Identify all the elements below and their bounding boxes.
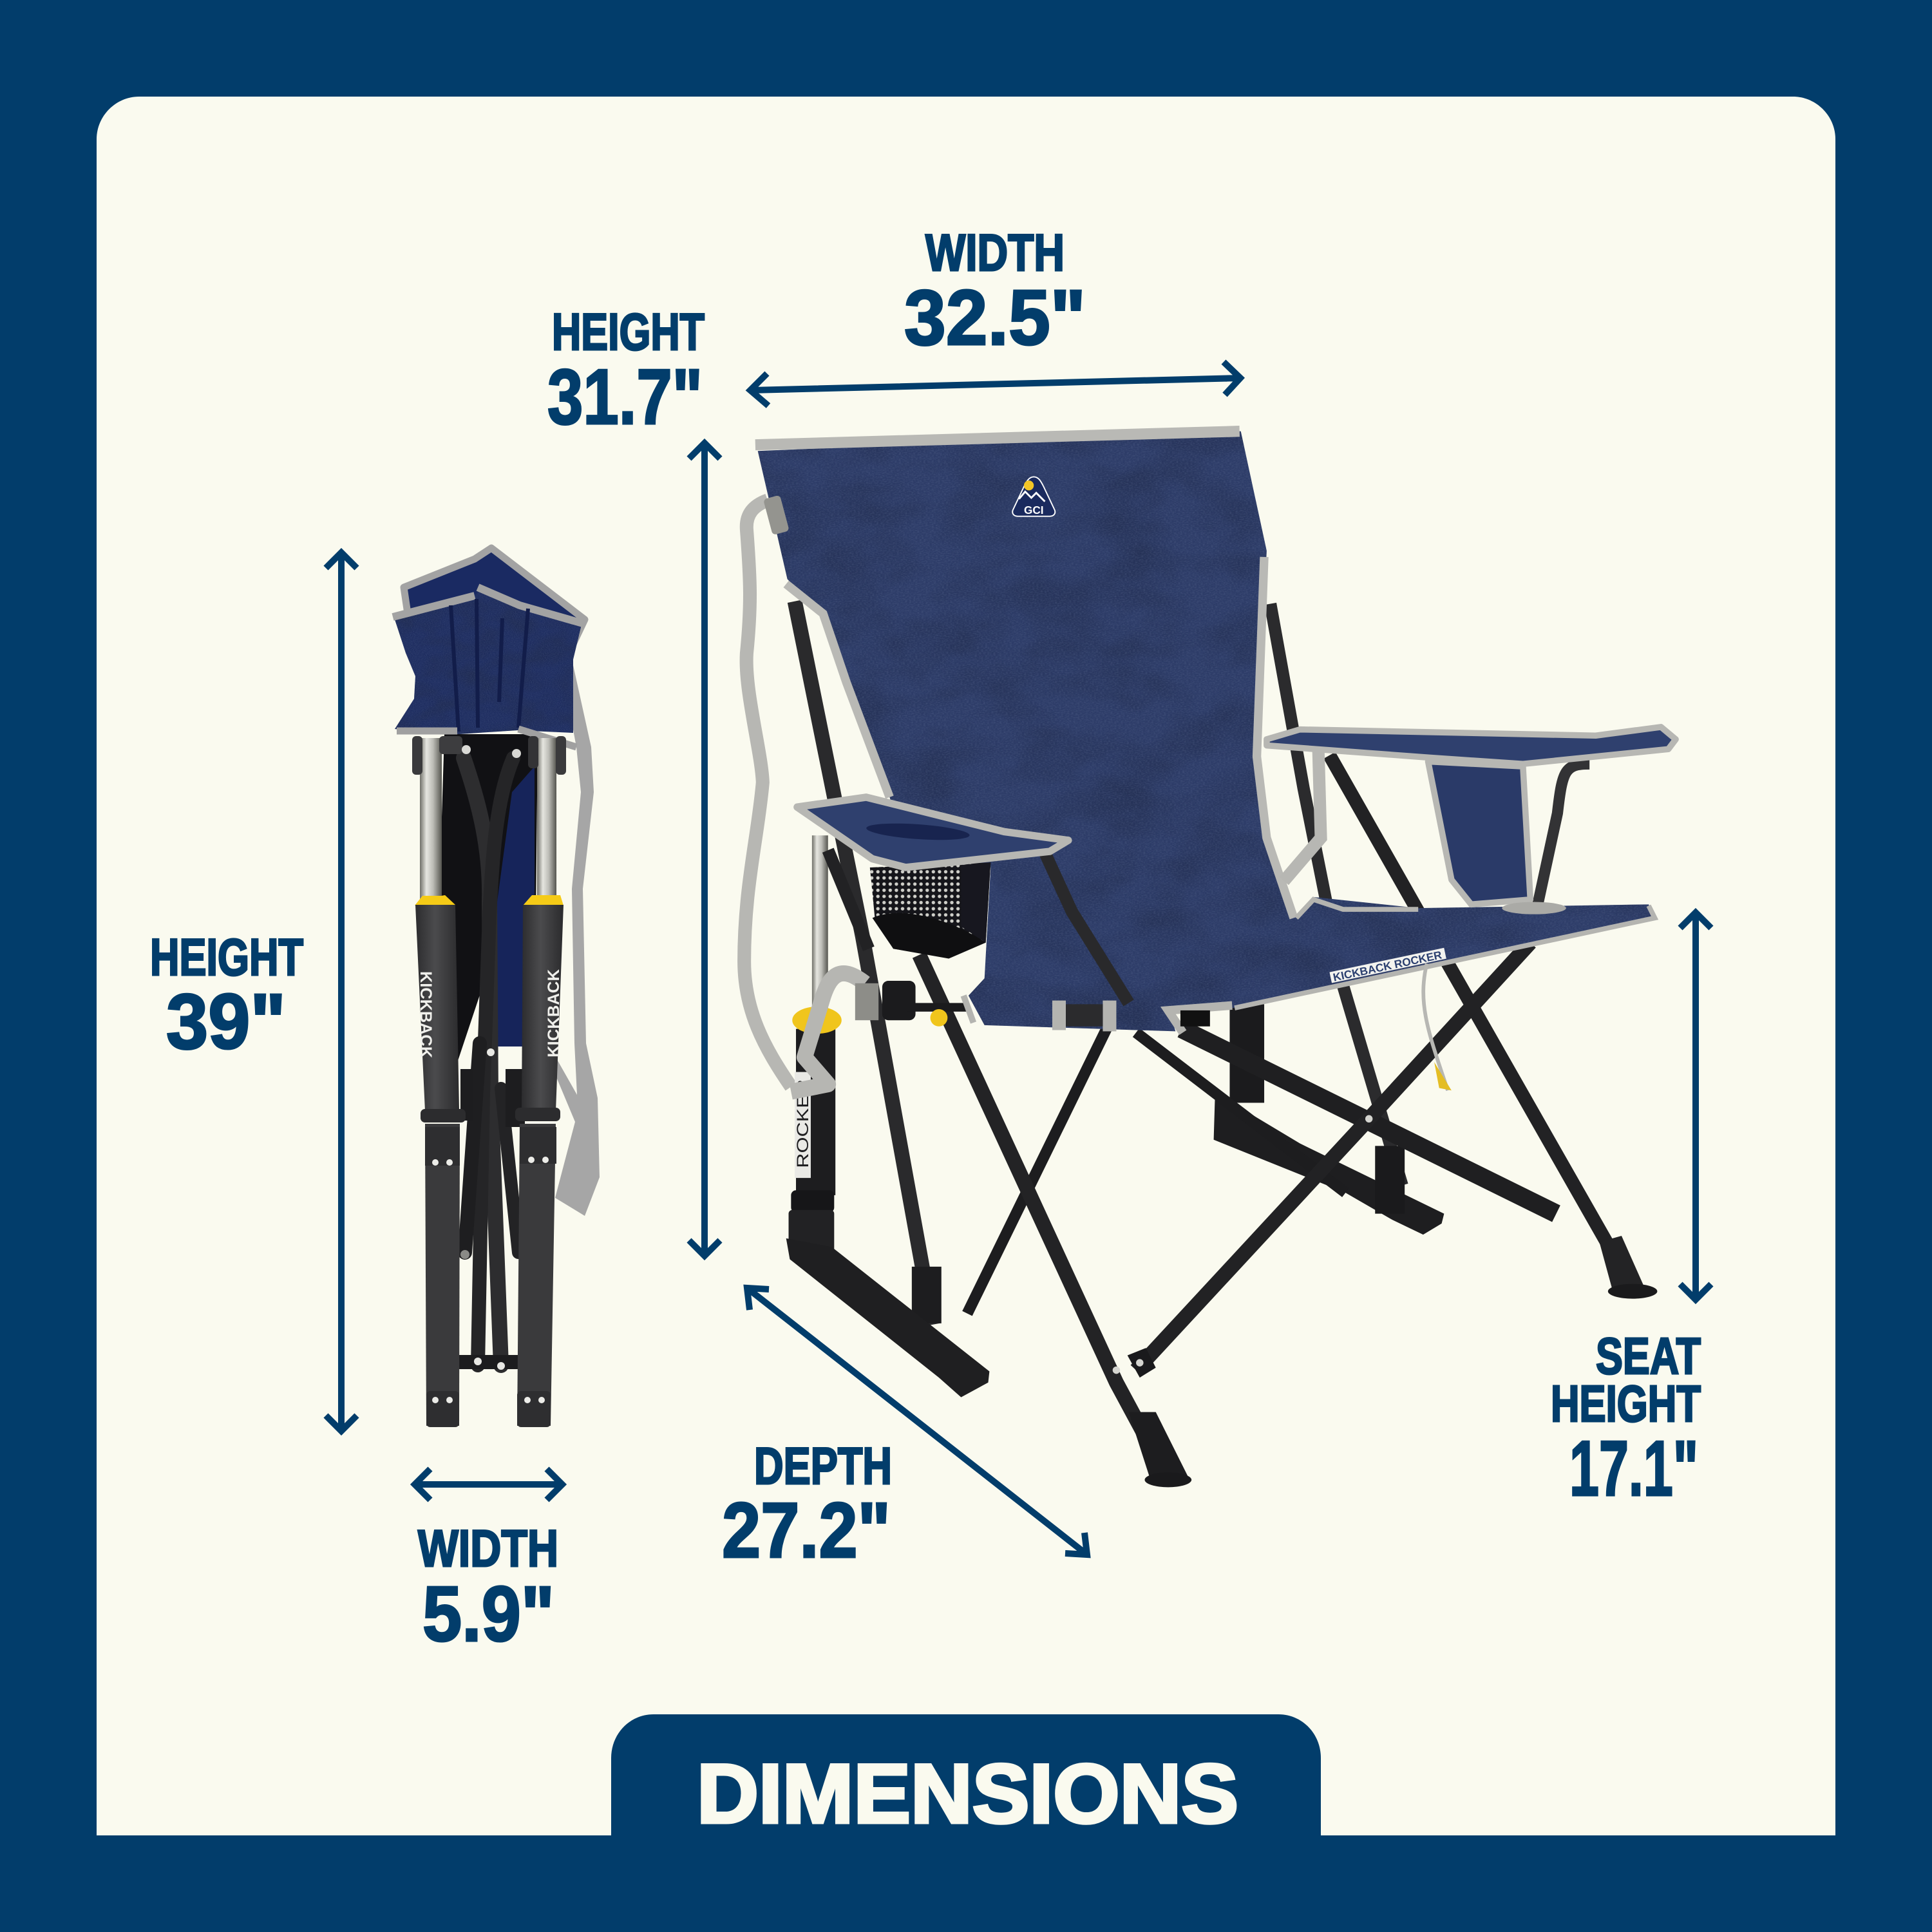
arrow: folded width xyxy=(415,1469,562,1500)
carrying strap behind back xyxy=(744,500,791,1087)
folded chair photo illustration xyxy=(393,548,600,1427)
strap loop xyxy=(791,973,865,1092)
rocker post label: ROCKER xyxy=(794,1079,812,1168)
label: top width xyxy=(904,224,1086,361)
label: seat height xyxy=(1551,1327,1701,1512)
label: depth: 27.2" xyxy=(722,1486,891,1574)
rocker post xyxy=(796,1029,835,1195)
locking collars xyxy=(421,1109,466,1122)
label: seat height: SEAT xyxy=(1596,1327,1701,1385)
hand lever xyxy=(882,981,916,1020)
arrow: folded height xyxy=(326,553,357,1431)
right arm tube xyxy=(1538,764,1589,904)
left back tube xyxy=(795,601,933,1325)
arrow: top width xyxy=(750,362,1240,406)
front fabric folds xyxy=(395,589,582,734)
front foot xyxy=(1129,1412,1188,1481)
folded chair photo illustration: KICKBACK xyxy=(545,969,563,1057)
steel rod xyxy=(812,835,828,1010)
kickback labels: KICKBACK xyxy=(417,971,435,1058)
rear fabric top xyxy=(404,548,585,644)
label: folded width xyxy=(418,1520,558,1658)
logo badge: GCI xyxy=(1024,504,1044,516)
rocking chair photo illustration xyxy=(744,431,1676,1487)
rocker post label xyxy=(794,1072,812,1178)
carry strap xyxy=(555,657,600,1216)
lower legs xyxy=(425,1124,460,1426)
rocker joint xyxy=(789,1210,834,1252)
lower bracket xyxy=(459,1355,520,1369)
left arm support tubes xyxy=(1044,850,1129,1003)
label: folded width: WIDTH xyxy=(418,1520,558,1578)
rear foot xyxy=(1599,1236,1646,1296)
label: depth: DEPTH xyxy=(754,1437,892,1495)
rear rocker bar xyxy=(1214,1099,1444,1235)
rear frame tubes xyxy=(1271,604,1629,1282)
seat brand tag: KICKBACK ROCKER xyxy=(1332,948,1443,984)
label: depth xyxy=(722,1437,892,1574)
steel rods xyxy=(420,738,442,902)
label: folded height: 39" xyxy=(166,978,286,1065)
label: chair height xyxy=(547,303,705,440)
folded centre poles xyxy=(464,758,518,1365)
yellow collars xyxy=(415,895,455,905)
joint bracket xyxy=(1128,1348,1156,1378)
cup net xyxy=(870,862,990,958)
tab: dimensions banner xyxy=(611,1714,1321,1841)
folded rocker cylinders xyxy=(415,905,459,1111)
strap bracket xyxy=(855,983,878,1020)
front rocker bar xyxy=(786,1238,989,1397)
logo badge xyxy=(1012,477,1055,516)
label: chair height: 31.7" xyxy=(547,353,703,440)
label: folded width: 5.9" xyxy=(422,1570,554,1658)
leg sleeve xyxy=(912,1267,942,1323)
label: top width: WIDTH xyxy=(925,224,1065,282)
right pocket xyxy=(1428,761,1530,904)
arrow: seat height xyxy=(1680,913,1711,1300)
front X frame xyxy=(919,943,1556,1479)
fabric backrest and seat xyxy=(758,431,1655,1031)
backrest top binding xyxy=(755,431,1240,445)
label: seat height: HEIGHT xyxy=(1551,1375,1701,1432)
seat strap clip xyxy=(1502,902,1566,914)
left armrest xyxy=(797,797,1068,867)
yellow collar xyxy=(792,1007,842,1034)
label: folded height: HEIGHT xyxy=(150,929,303,987)
label: folded height xyxy=(150,929,303,1065)
label: top width: 32.5" xyxy=(904,274,1086,361)
arrow: depth xyxy=(747,1288,1087,1555)
hinge hardware xyxy=(506,1069,525,1127)
arrow: chair height xyxy=(689,443,720,1256)
heading: dimensions: DIMENSIONS xyxy=(697,1747,1238,1841)
hinge pivots xyxy=(412,736,422,775)
interior fabric of folded chair xyxy=(441,734,538,1063)
rear rocker post xyxy=(1229,1004,1264,1103)
right armrest xyxy=(1267,727,1676,764)
seat binding xyxy=(1235,900,1655,1008)
strap right xyxy=(1284,752,1321,881)
backrest side binding xyxy=(786,557,1294,918)
label: seat height: 17.1" xyxy=(1569,1425,1698,1512)
label: chair height: HEIGHT xyxy=(552,303,705,361)
bracket xyxy=(763,495,790,535)
